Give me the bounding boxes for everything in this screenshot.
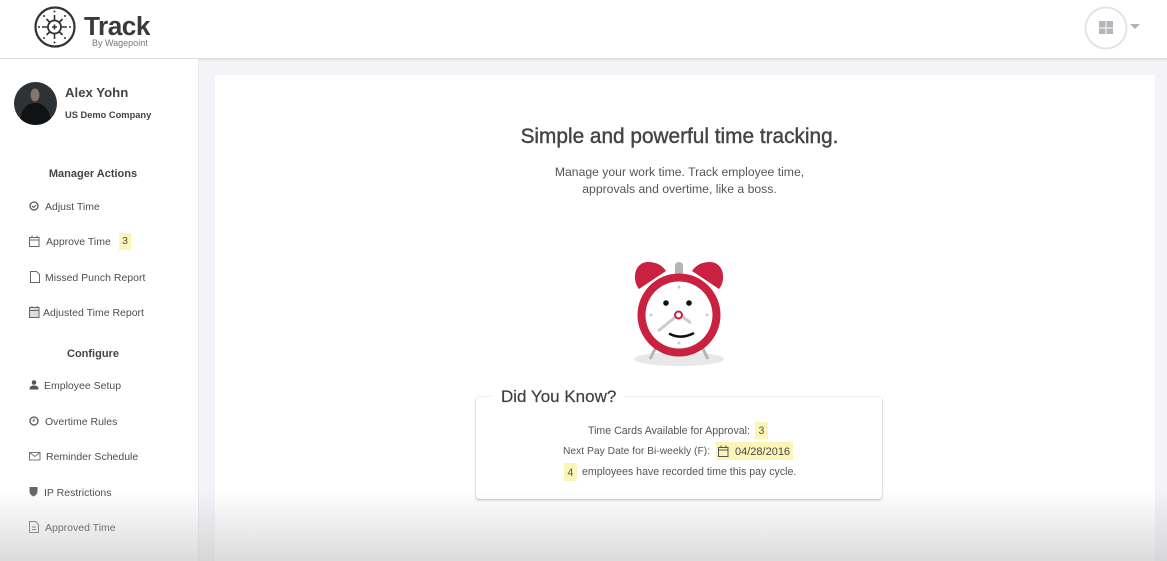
logo tagline: By Wagepoint — [92, 38, 148, 48]
badge: pay date — [716, 442, 793, 460]
nav: ip restrictions: IP Restrictions — [44, 487, 112, 499]
section heading: configure: Configure — [67, 348, 119, 360]
badge: employees — [564, 463, 577, 481]
panel heading: Did You Know? — [501, 387, 616, 406]
line: employees recorded — [564, 463, 796, 481]
nav: reminder schedule: Reminder Schedule — [46, 451, 138, 463]
line: time cards — [588, 422, 768, 439]
badge: 3 — [122, 235, 128, 247]
logo wordmark: Track — [84, 11, 150, 41]
nav: approve time — [29, 233, 131, 250]
icon: clock — [29, 416, 39, 426]
icon: calendar — [29, 236, 40, 247]
logo — [34, 6, 150, 48]
icon: text file — [29, 521, 39, 533]
line: next pay date: Next Pay Date for Bi-weekly (F): — [563, 446, 710, 457]
user profile — [14, 82, 152, 125]
intro text: approvals and overtime, like a boss. — [582, 182, 777, 196]
icon: shield — [30, 487, 38, 496]
user name: Alex Yohn — [65, 85, 128, 100]
section heading: manager actions: Manager Actions — [49, 168, 137, 180]
nav: adjust time: Adjust Time — [45, 201, 100, 213]
nav: employee setup: Employee Setup — [44, 380, 121, 392]
bottom fade overlay — [0, 490, 1167, 561]
main content panel — [215, 75, 1155, 561]
badge: time cards — [755, 422, 768, 439]
panel: did you know — [476, 397, 882, 499]
icon: dropdown caret — [1130, 24, 1140, 29]
nav: overtime rules: Overtime Rules — [45, 416, 117, 428]
badge: pay date: 04/28/2016 — [735, 446, 790, 458]
icon: document — [30, 271, 40, 283]
nav: adjusted time report: Adjusted Time Report — [43, 307, 144, 319]
nav: missed punch report: Missed Punch Report — [45, 272, 145, 284]
badge — [119, 233, 131, 250]
icon: person — [30, 380, 38, 390]
avatar — [14, 82, 57, 125]
illustration: alarm clock — [634, 262, 724, 366]
line: next pay date — [563, 442, 793, 460]
sidebar — [0, 59, 199, 561]
company name: US Demo Company — [65, 110, 151, 120]
nav: approve time: Approve Time — [46, 236, 111, 248]
intro text — [555, 165, 804, 196]
account menu button — [1084, 6, 1140, 50]
intro text: Manage your work time. Track employee time, — [555, 165, 804, 179]
icon: filled calendar — [29, 306, 40, 318]
main heading: Simple and powerful time tracking. — [521, 125, 838, 148]
badge: employees: 4 — [568, 467, 573, 479]
icon: grid button — [1084, 6, 1128, 50]
icon: check circle — [29, 201, 39, 211]
badge: time cards: 3 — [759, 425, 764, 437]
line: time cards: Time Cards Available for Approval: — [588, 425, 750, 437]
top header bar — [0, 0, 1167, 59]
icon: envelope — [29, 452, 40, 460]
icon: logo sun dial — [34, 6, 76, 48]
line: employees recorded: employees have recorded time this pay cycle. — [582, 466, 796, 478]
nav: approved time: Approved Time — [45, 522, 116, 534]
